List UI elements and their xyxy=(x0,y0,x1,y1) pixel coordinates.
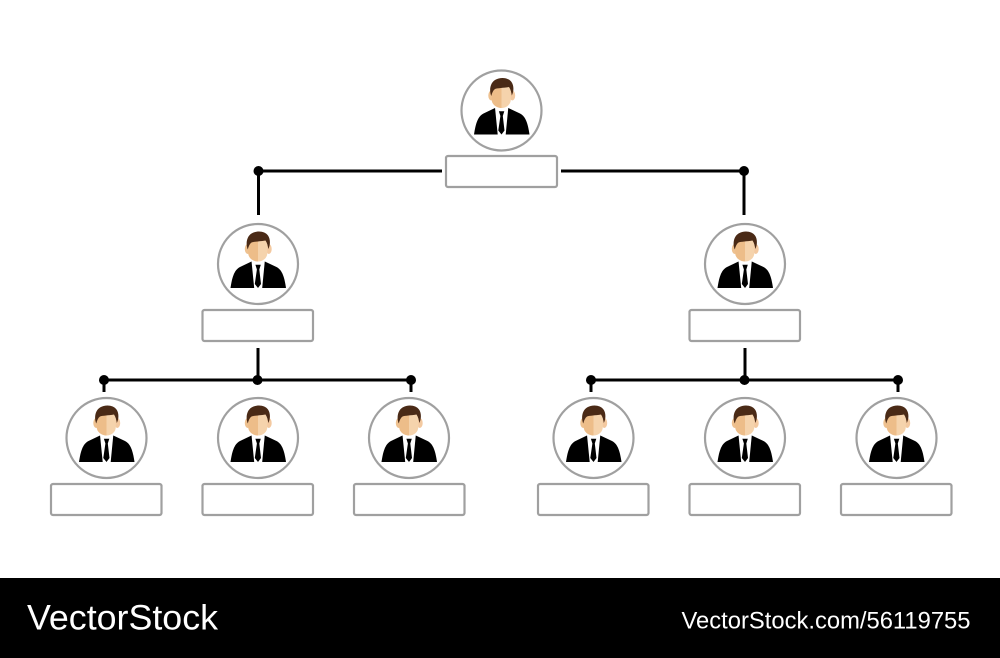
node: staff 6 xyxy=(841,398,952,515)
image id: VectorStock.com/56119755 xyxy=(682,608,970,634)
node: staff 3 xyxy=(354,398,464,515)
footer bar xyxy=(0,578,1000,658)
node: manager right xyxy=(690,224,800,341)
connector: right branch xyxy=(586,348,903,392)
node: staff 1 xyxy=(51,398,162,515)
node: staff 5 xyxy=(690,398,800,515)
node: staff 4 xyxy=(538,398,648,515)
connector: top level branches xyxy=(254,166,749,215)
node: manager left xyxy=(202,224,313,341)
node: top executive xyxy=(446,70,557,187)
brand name: VectorStock xyxy=(27,598,219,638)
node: staff 2 xyxy=(202,398,313,515)
connector: left branch xyxy=(99,348,416,392)
